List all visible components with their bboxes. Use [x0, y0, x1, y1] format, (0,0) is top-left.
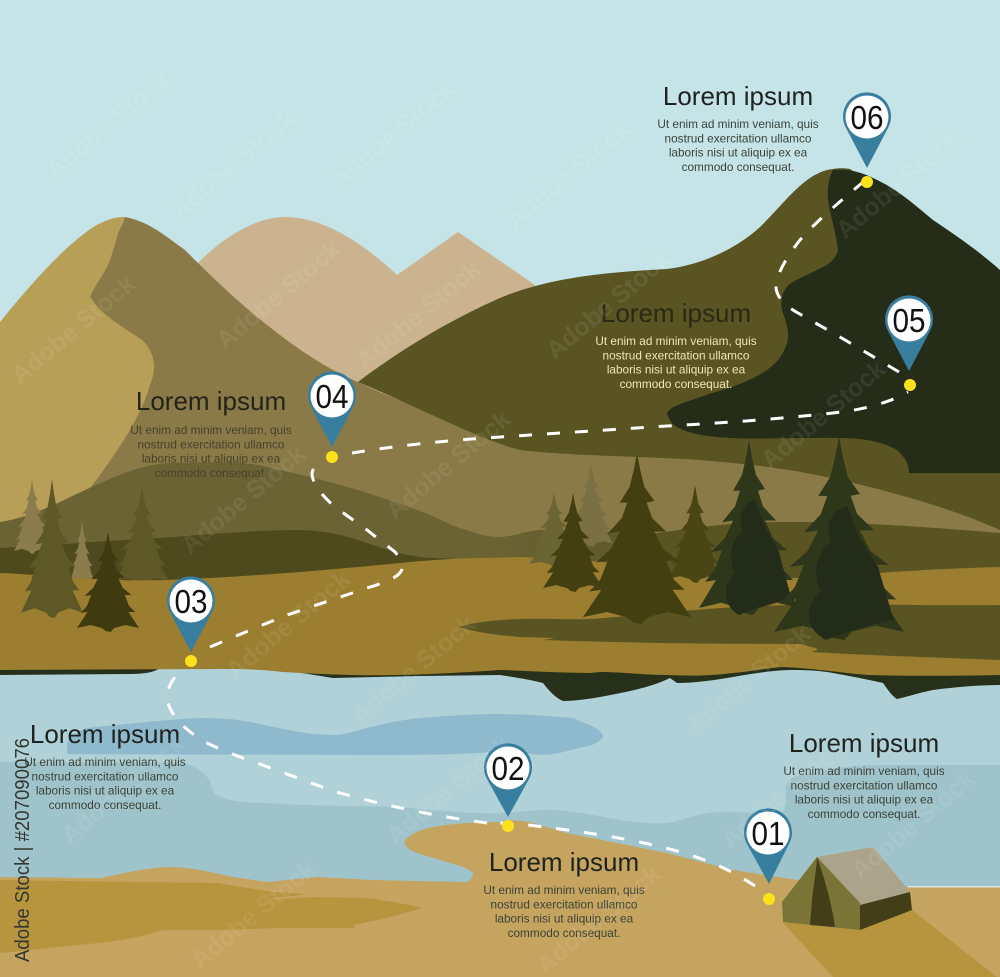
text block 02: Ut enim ad minim veniam, quis [483, 883, 645, 897]
sunlit left mountain face [0, 217, 154, 580]
text block 03: nostrud exercitation ullamco [32, 769, 179, 783]
stock watermarks: Adobe Stock [501, 115, 636, 235]
stock id side label: Adobe Stock | #207090076 [12, 738, 34, 962]
icon: tent [782, 847, 912, 930]
stock watermarks: Adobe Stock [381, 405, 516, 525]
pin 06: 06 [850, 99, 884, 136]
meadow grass [0, 557, 1000, 676]
middle hill band [0, 462, 1000, 620]
text block 06: commodo consequat. [682, 160, 794, 174]
text block 05: Ut enim ad minim veniam, quis [595, 334, 757, 348]
text block 02: laboris nisi ut aliquip ex ea [495, 912, 634, 926]
text block 04: laboris nisi ut aliquip ex ea [142, 452, 281, 466]
text block 06: nostrud exercitation ullamco [665, 131, 812, 145]
pin 03 [167, 576, 215, 667]
pin 01: 01 [752, 815, 784, 852]
text block 06: laboris nisi ut aliquip ex ea [669, 146, 808, 160]
text block 03: laboris nisi ut aliquip ex ea [36, 784, 175, 798]
shoreline highlight [908, 886, 1000, 888]
text block 03 [24, 719, 186, 812]
dark tree reflection on bank [283, 660, 1000, 701]
stock watermarks: Adobe Stock [346, 610, 481, 730]
stock watermarks: Adobe Stock [831, 125, 966, 245]
stock watermarks: Adobe Stock [846, 765, 981, 885]
foreground sand [0, 820, 1000, 977]
text block 04: Lorem ipsum [136, 386, 286, 416]
text block 03: Ut enim ad minim veniam, quis [24, 755, 186, 769]
stock watermarks: Adobe Stock [351, 255, 486, 375]
text block 06: Lorem ipsum [663, 81, 813, 111]
stock watermarks: Adobe Stock [41, 65, 176, 185]
stock watermarks: Adobe Stock [531, 860, 666, 977]
text block 04 [130, 386, 292, 480]
deeper water band [0, 762, 1000, 895]
pin 04: 04 [316, 378, 348, 415]
far trees [14, 463, 613, 593]
text block 03: commodo consequat. [49, 798, 161, 812]
meadow tree shadow [459, 604, 1000, 660]
stock watermarks: Adobe Stock [326, 75, 461, 195]
stock watermarks: Adobe Stock [211, 235, 346, 355]
dark mountain shadow side [667, 170, 1000, 473]
text block 06: Ut enim ad minim veniam, quis [657, 117, 819, 131]
text block 05: nostrud exercitation ullamco [603, 348, 750, 362]
dark river bank left [0, 668, 160, 675]
text block 04: commodo consequat. [155, 466, 267, 480]
pin 05: 05 [892, 302, 926, 339]
text block 01: commodo consequat. [808, 807, 920, 821]
river water [0, 668, 1000, 900]
text block 01: Lorem ipsum [789, 728, 939, 758]
pin 02 [484, 743, 532, 832]
stock watermarks: Adobe Stock [716, 735, 851, 855]
stock watermarks: Adobe Stock [166, 105, 301, 225]
text block 01: Ut enim ad minim veniam, quis [783, 764, 945, 778]
dark left hill [0, 530, 490, 600]
stock watermarks: Adobe Stock [681, 620, 816, 740]
text block 04: nostrud exercitation ullamco [138, 437, 285, 451]
stock watermarks: Adobe Stock [756, 355, 891, 475]
stock watermarks: Adobe Stock [541, 245, 676, 365]
tent shadow [783, 910, 997, 977]
pin 06 [843, 92, 891, 188]
text block 05 [595, 298, 757, 391]
text block 05: laboris nisi ut aliquip ex ea [607, 363, 746, 377]
sand shadow patch [0, 880, 422, 953]
text block 01: nostrud exercitation ullamco [791, 778, 938, 792]
stock watermarks: Adobe Stock [381, 730, 516, 850]
stock watermarks: Adobe Stock [6, 270, 141, 390]
shaded left mountain [0, 217, 1000, 620]
far tan mountains [197, 217, 535, 420]
stock watermarks: Adobe Stock [221, 565, 356, 685]
text block 06 [657, 81, 819, 174]
dashed route [167, 183, 908, 886]
text block 01 [783, 728, 945, 821]
left foreground trees [21, 479, 139, 632]
text block 04: Ut enim ad minim veniam, quis [130, 423, 292, 437]
text block 02: commodo consequat. [508, 926, 620, 940]
sky reflection in water [67, 714, 603, 755]
stock watermarks: Adobe Stock [56, 730, 191, 850]
pin 05 [885, 295, 933, 391]
pin 03: 03 [174, 583, 208, 620]
text block 05: Lorem ipsum [601, 298, 751, 328]
text block 05: commodo consequat. [620, 377, 732, 391]
stock watermarks: Adobe Stock [186, 855, 321, 975]
right pine trees [529, 437, 904, 640]
text block 03: Lorem ipsum [30, 719, 180, 749]
text block 01: laboris nisi ut aliquip ex ea [795, 793, 934, 807]
text block 02: Lorem ipsum [489, 847, 639, 877]
pin 02: 02 [492, 750, 524, 787]
right olive mountain [358, 168, 1000, 530]
pin 04 [308, 371, 356, 463]
stock watermarks: Adobe Stock [176, 440, 311, 560]
text block 02 [483, 847, 645, 940]
pin 01 [744, 808, 792, 905]
text block 02: nostrud exercitation ullamco [491, 897, 638, 911]
